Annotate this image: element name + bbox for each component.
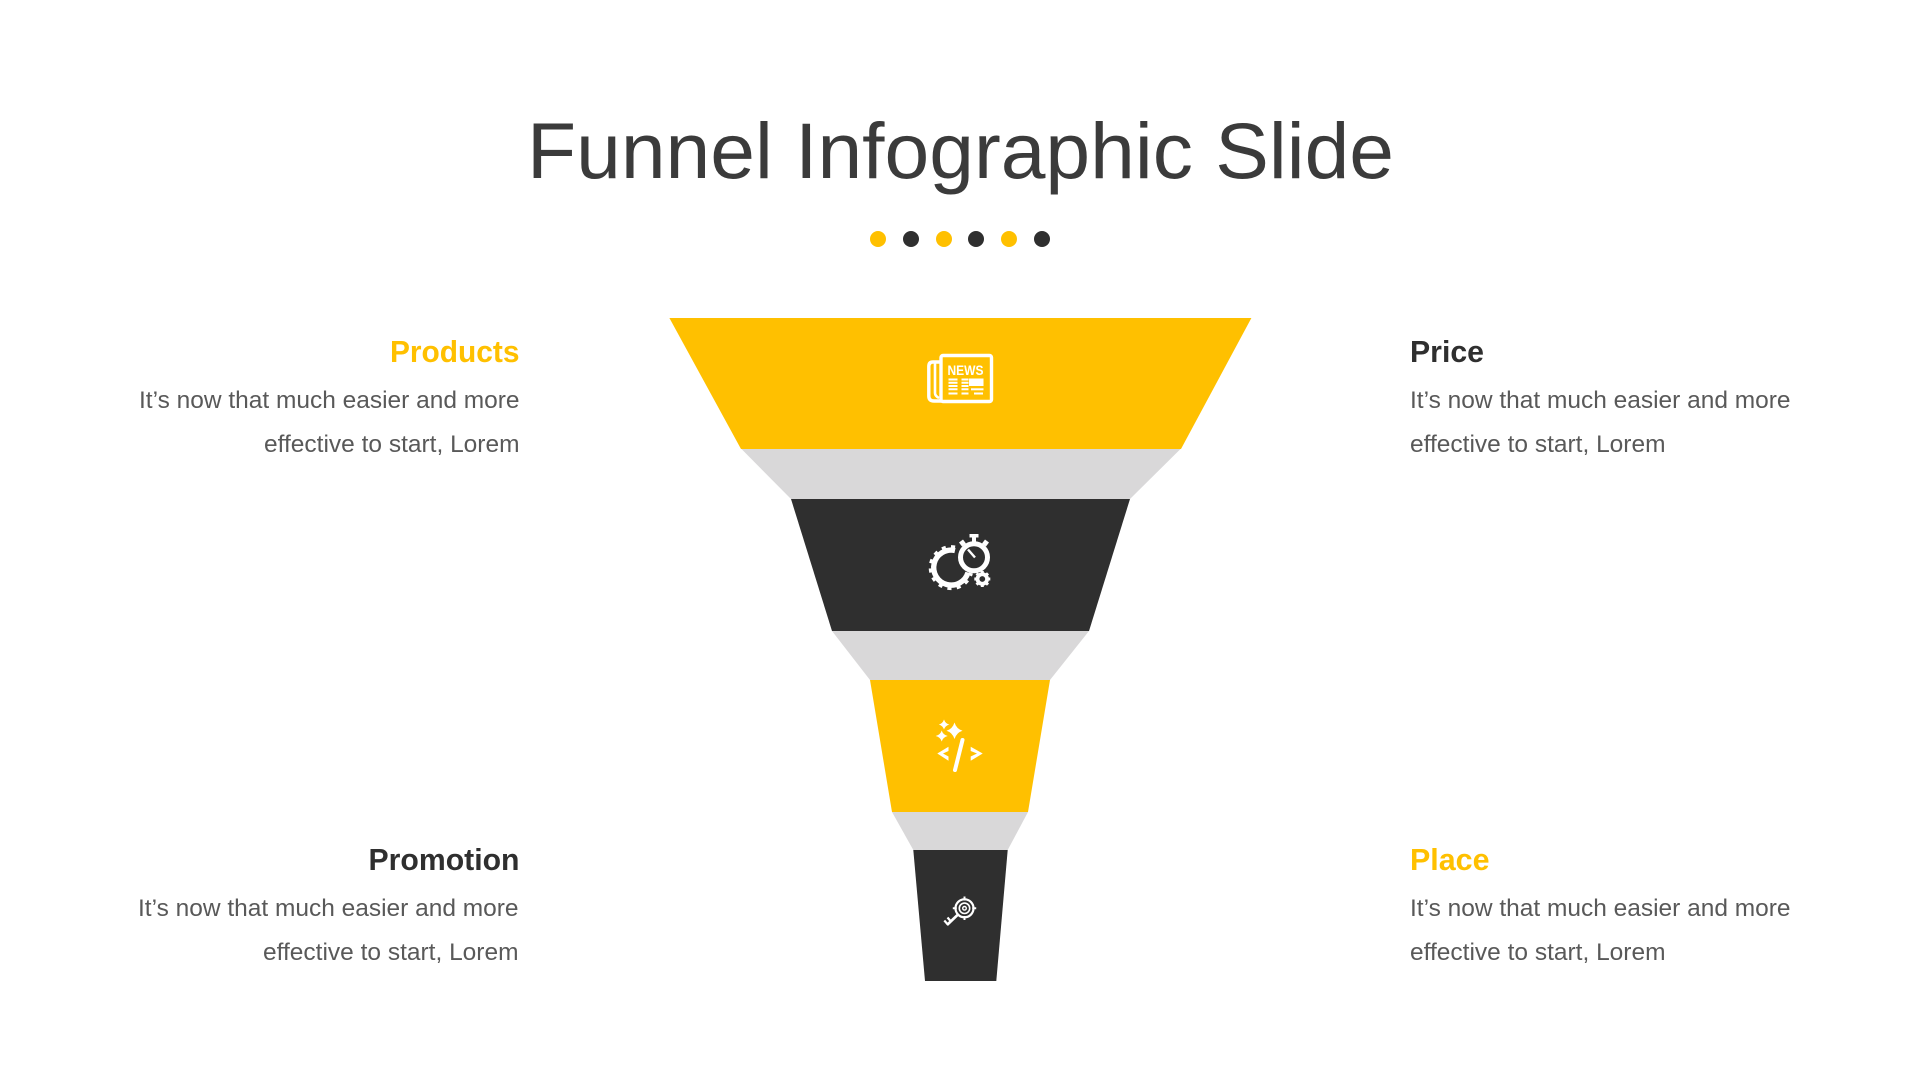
text block: Price: It’s now that much easier and more xyxy=(1410,387,1790,414)
text block: Products xyxy=(139,334,520,458)
funnel connector 1 xyxy=(741,448,1181,499)
icon: newspaper: NEWS xyxy=(948,362,984,378)
icon: gears and stopwatch xyxy=(931,534,990,588)
text block: Products: Products xyxy=(390,334,520,369)
funnel segment 2 xyxy=(791,499,1130,631)
icon: code with sparkles xyxy=(936,720,983,770)
text block: Place: effective to start, Lorem xyxy=(1410,939,1666,966)
text block: Place: Place xyxy=(1410,842,1490,877)
text block: Promotion xyxy=(138,842,520,966)
funnel segment 1 xyxy=(669,318,1251,449)
funnel xyxy=(669,318,1251,981)
text block: Products: effective to start, Lorem xyxy=(264,431,520,458)
text block: Price xyxy=(1410,334,1790,458)
title dots xyxy=(870,231,1050,247)
text block: Products: It’s now that much easier and more xyxy=(139,387,520,414)
icon: target key xyxy=(944,896,976,925)
text block: Promotion: Promotion xyxy=(368,842,520,877)
title: Funnel Infographic Slide xyxy=(527,106,1394,195)
text block: Price: effective to start, Lorem xyxy=(1410,431,1666,458)
funnel connector 3 xyxy=(892,812,1028,850)
funnel connector 2 xyxy=(832,631,1089,680)
text block: Promotion: effective to start, Lorem xyxy=(263,939,518,966)
funnel segment 4 xyxy=(913,850,1008,981)
text block: Place: It’s now that much easier and more xyxy=(1410,895,1790,922)
icon: newspaper xyxy=(929,356,992,402)
funnel segment 3 xyxy=(870,680,1050,812)
text block: Promotion: It’s now that much easier and more xyxy=(138,895,518,922)
text block: Place xyxy=(1410,842,1790,966)
text block: Price: Price xyxy=(1410,334,1484,369)
